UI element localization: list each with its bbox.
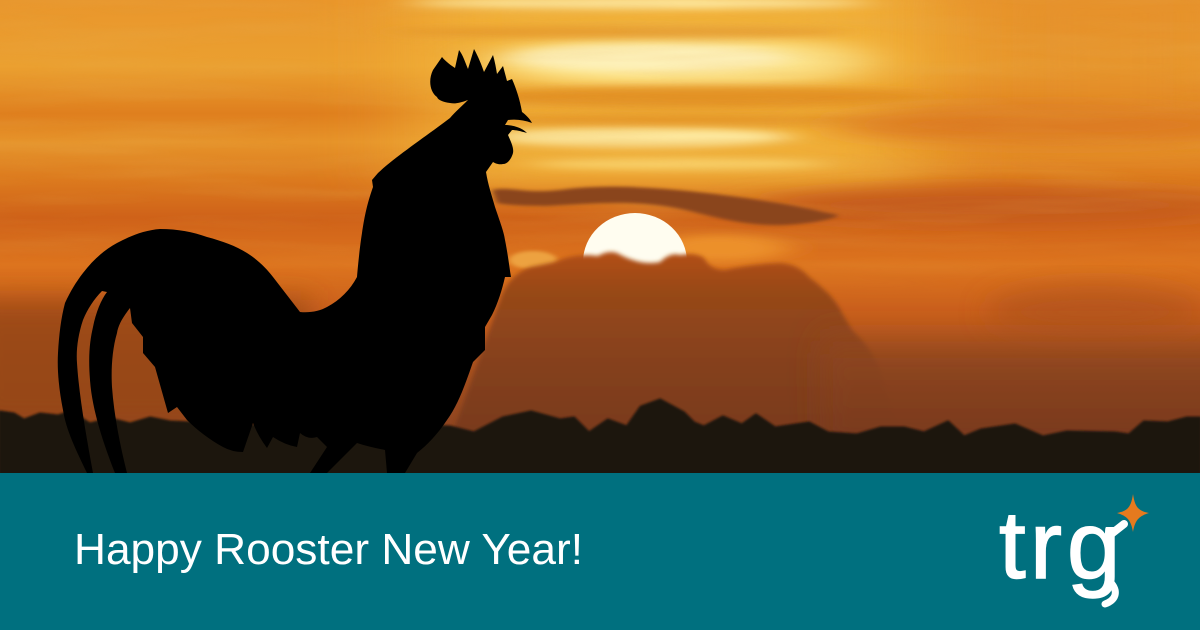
icon: logo g tail [1105,584,1115,604]
logo: trg [999,492,1149,604]
small glowing cloud by rooster [509,251,557,269]
haze on the right [820,325,1200,453]
icon: orange star [1117,494,1149,532]
faint clouds on the right [985,286,1200,338]
logo: trg: r [1030,492,1062,599]
left haze behind tail [0,300,310,430]
sunset sky [0,0,1200,473]
thin dark cloud above sun [492,187,838,225]
heading: Happy Rooster New Year! [74,525,583,574]
rooster silhouette [58,49,532,473]
tree line [0,400,1200,480]
large cloud bank [450,252,900,440]
teal footer band [0,473,1200,630]
logo: trg: t [999,492,1026,599]
sun [583,213,687,311]
logo: trg: g [1067,492,1120,599]
icon: logo g ear [1110,524,1124,535]
